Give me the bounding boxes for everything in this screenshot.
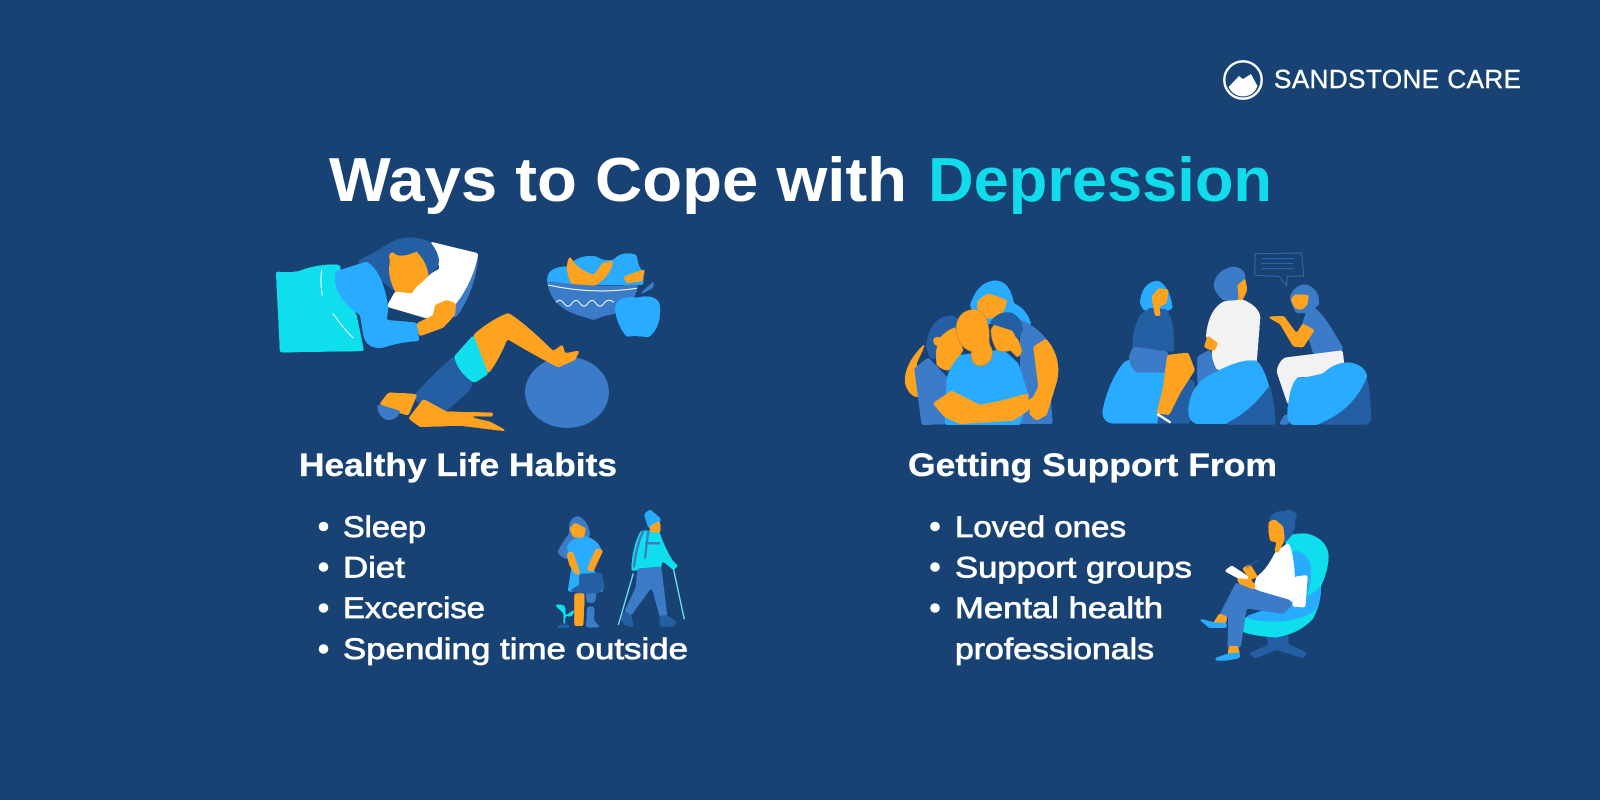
- heading: Healthy Life Habits: Healthy Life Habits: [299, 447, 617, 483]
- chair base: [1249, 635, 1307, 658]
- blanket: [276, 265, 364, 352]
- woman 2 shirt: [1302, 305, 1343, 354]
- illustration: person sleeping: [276, 237, 478, 352]
- list: healthy habits: Spending time outside: [343, 633, 688, 666]
- list: healthy habits: [319, 511, 688, 666]
- man face: [1236, 277, 1247, 300]
- arm and hand: [1236, 564, 1258, 590]
- gardener face: [569, 523, 586, 537]
- pillow shadow: [427, 253, 478, 320]
- title: Depression: [928, 146, 1272, 215]
- beanbag 1: [1103, 360, 1195, 423]
- list: support sources: Support groups: [955, 552, 1192, 584]
- legs: [473, 313, 580, 374]
- beanbag 3 shadow: [1317, 377, 1371, 425]
- woman 1 face and neck: [1152, 288, 1169, 316]
- white cushion: [1292, 575, 1308, 607]
- list: support sources: Mental health: [955, 592, 1163, 625]
- list: healthy habits: Sleep: [343, 511, 426, 544]
- left child face: [933, 327, 963, 371]
- woman 2 hair: [1290, 284, 1319, 313]
- left child body: [914, 357, 950, 425]
- list: support sources: Loved ones: [955, 511, 1126, 544]
- head: [379, 393, 417, 416]
- man shirt: [1206, 299, 1260, 372]
- therapist face: [1268, 519, 1285, 553]
- woman 2 shoe: [1279, 414, 1290, 425]
- list: healthy habits: Diet: [343, 552, 406, 584]
- speech bubble: [1255, 253, 1304, 286]
- heading: Getting Support From: Getting Support From: [908, 447, 1277, 483]
- gardener knee and prosthetic: [586, 593, 601, 627]
- watering can: [569, 573, 605, 596]
- arm and torso: [335, 262, 419, 348]
- hiker jacket: [631, 531, 678, 571]
- logo: Sandstone Care: [1224, 61, 1521, 99]
- woman 1 hair: [1140, 281, 1173, 313]
- bowl decoration: [548, 285, 637, 306]
- illustration: salad bowl and apple: [547, 253, 660, 337]
- beanbag 2 shadow: [1223, 385, 1276, 425]
- list: support sources: [930, 511, 1192, 666]
- man back: [1197, 349, 1218, 385]
- chair inner: [1245, 551, 1321, 622]
- woman 1 torso: [1132, 308, 1174, 352]
- torso: [414, 356, 473, 412]
- leaf on apple: [633, 280, 655, 297]
- hiker trousers: [624, 567, 667, 617]
- hair: [357, 237, 439, 290]
- hiker backpack straps: [634, 530, 660, 567]
- right child hair: [989, 312, 1023, 340]
- back woman hair: [970, 281, 1032, 325]
- beanbag 3: [1287, 363, 1367, 425]
- icon: mountain in circle: [1224, 61, 1262, 99]
- front child shirt: [945, 349, 1029, 425]
- gardener hair: [558, 516, 590, 559]
- feet: [1213, 613, 1240, 659]
- right child face: [991, 324, 1022, 357]
- title: Ways to Cope with: [329, 146, 907, 215]
- gardener leg: [574, 593, 585, 626]
- logo wordmark: SANDSTONE CARE: [1274, 64, 1521, 94]
- shoes: [1197, 618, 1240, 661]
- woman 1 skirt: [1129, 347, 1168, 372]
- list: healthy habits: Excercise: [343, 592, 485, 625]
- therapist shirt: [1253, 543, 1295, 602]
- hiker boots: [620, 611, 677, 627]
- hugging arms: [933, 391, 1029, 424]
- beanbag 1 shadow: [1157, 372, 1195, 423]
- hiker face: [649, 521, 661, 532]
- woman 1 leg: [1157, 353, 1195, 415]
- shorts: [454, 335, 488, 383]
- hair: [378, 404, 401, 420]
- woman 2 arm: [1267, 316, 1315, 347]
- man hair: [1214, 267, 1245, 301]
- back woman face: [977, 293, 1007, 318]
- left child arm: [905, 342, 927, 397]
- gardener dress: [567, 536, 604, 592]
- beanbag 2: [1188, 360, 1276, 424]
- clipboard: [1224, 565, 1251, 583]
- plant: [554, 604, 576, 625]
- trekking poles: [618, 568, 684, 625]
- man arm: [1204, 335, 1218, 351]
- back woman arm: [1028, 339, 1058, 421]
- woman 2 trousers: [1277, 350, 1344, 406]
- pen: [1247, 560, 1258, 567]
- illustration: person exercising on ball: [378, 313, 609, 432]
- therapist hair: [1269, 509, 1297, 542]
- illustration: support group: [1103, 253, 1371, 425]
- arms and chest: [408, 399, 509, 432]
- blanket creases: [321, 270, 353, 338]
- face: [389, 252, 429, 293]
- apple: [615, 296, 660, 337]
- plant soil: [555, 624, 572, 628]
- illustration: gardener and hiker: [554, 509, 684, 628]
- hiker hat: [644, 509, 661, 528]
- woman 2 face: [1291, 294, 1309, 310]
- back woman shirt: [1020, 319, 1053, 424]
- gardener arms: [567, 548, 603, 575]
- front child head: [956, 309, 992, 366]
- leaves: [547, 253, 643, 285]
- orange slices: [567, 256, 645, 286]
- left child hair: [926, 315, 962, 358]
- title: [329, 146, 1272, 215]
- chair outer: [1242, 533, 1329, 637]
- trousers: [1219, 583, 1292, 648]
- bowl: [547, 281, 638, 320]
- woman 1 shoe: [1157, 414, 1171, 423]
- hand: [1028, 394, 1047, 421]
- pillow under head: [387, 242, 478, 318]
- hand: [417, 300, 456, 336]
- illustration: therapist in chair: [1197, 509, 1329, 661]
- exercise ball: [525, 357, 609, 428]
- illustration: family hug: [905, 281, 1058, 425]
- list: support sources: professionals: [955, 633, 1154, 666]
